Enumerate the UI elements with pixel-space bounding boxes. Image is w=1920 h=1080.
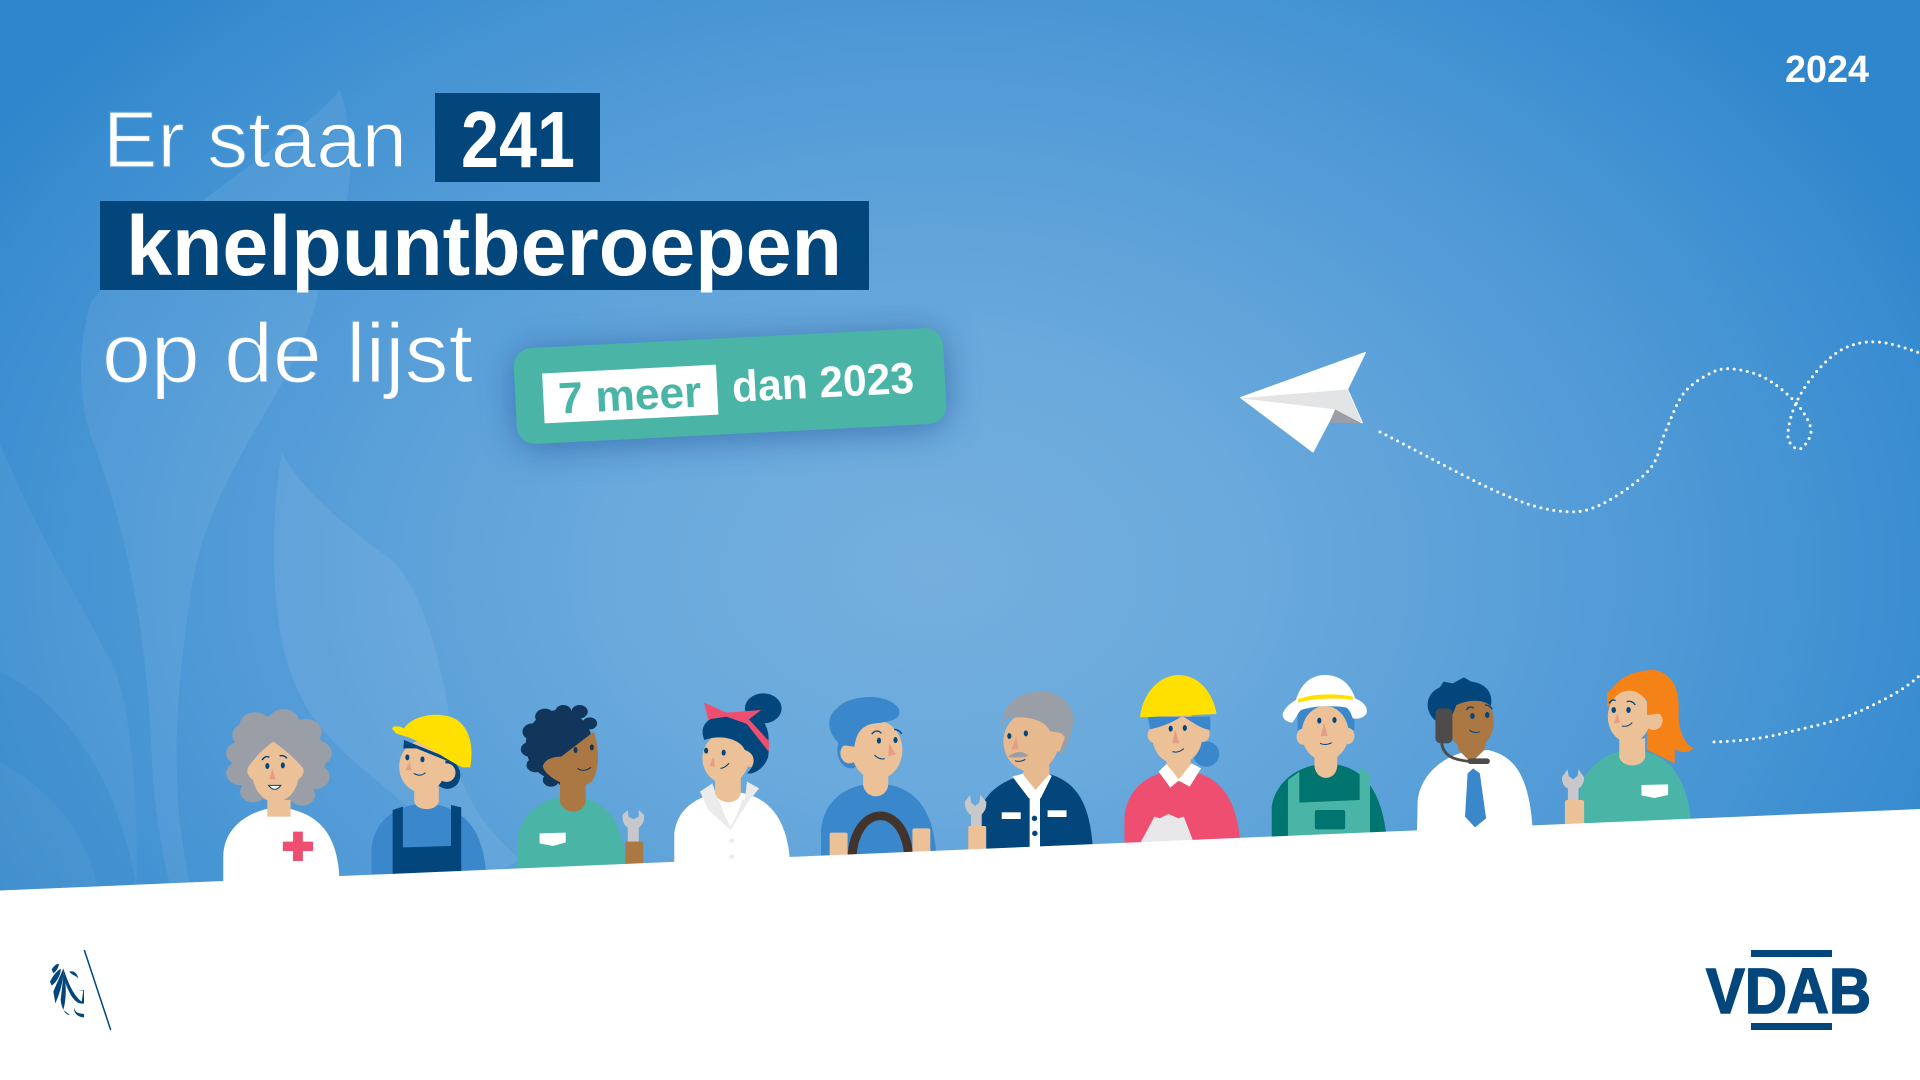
person: driver with steering wheel	[821, 697, 937, 863]
person: inspector with yellow helmet	[1124, 675, 1241, 857]
lion divider line	[84, 950, 111, 1030]
dotted flight path right	[1714, 675, 1920, 742]
white footer wedge	[0, 809, 1920, 1080]
badge: 7 meer dan 2023: dan 2023	[731, 354, 915, 412]
person: mechanic with orange hair	[1562, 670, 1693, 843]
logo: VDAB: VDAB	[1706, 955, 1871, 1027]
title line 1: Er staan	[103, 95, 407, 184]
title	[100, 93, 869, 400]
person: lab coat with bandana	[674, 693, 791, 873]
person: worker with white helmet	[1272, 675, 1388, 857]
heading highlight knelpuntberoepen: knelpuntberoepen	[126, 199, 842, 293]
person: senior mechanic with moustache	[965, 691, 1093, 863]
person: mechanic green shirt	[518, 705, 644, 887]
paper plane	[1241, 353, 1365, 452]
badge: 7 meer dan 2023: 7 meer	[557, 367, 703, 424]
logo: Flemish lion	[50, 950, 111, 1030]
year label: 2024	[1785, 49, 1869, 91]
person: nurse	[223, 709, 340, 887]
person: construction worker	[371, 715, 487, 883]
title line 3: op de lijst	[102, 306, 473, 400]
number highlight 241: 241	[461, 95, 575, 184]
person: call centre agent	[1417, 677, 1533, 850]
lion mark	[50, 964, 84, 1017]
background leaf pattern	[0, 90, 520, 900]
dotted flight path	[1380, 342, 1920, 512]
badge: 7 meer dan 2023	[513, 327, 947, 449]
people row	[223, 670, 1693, 887]
